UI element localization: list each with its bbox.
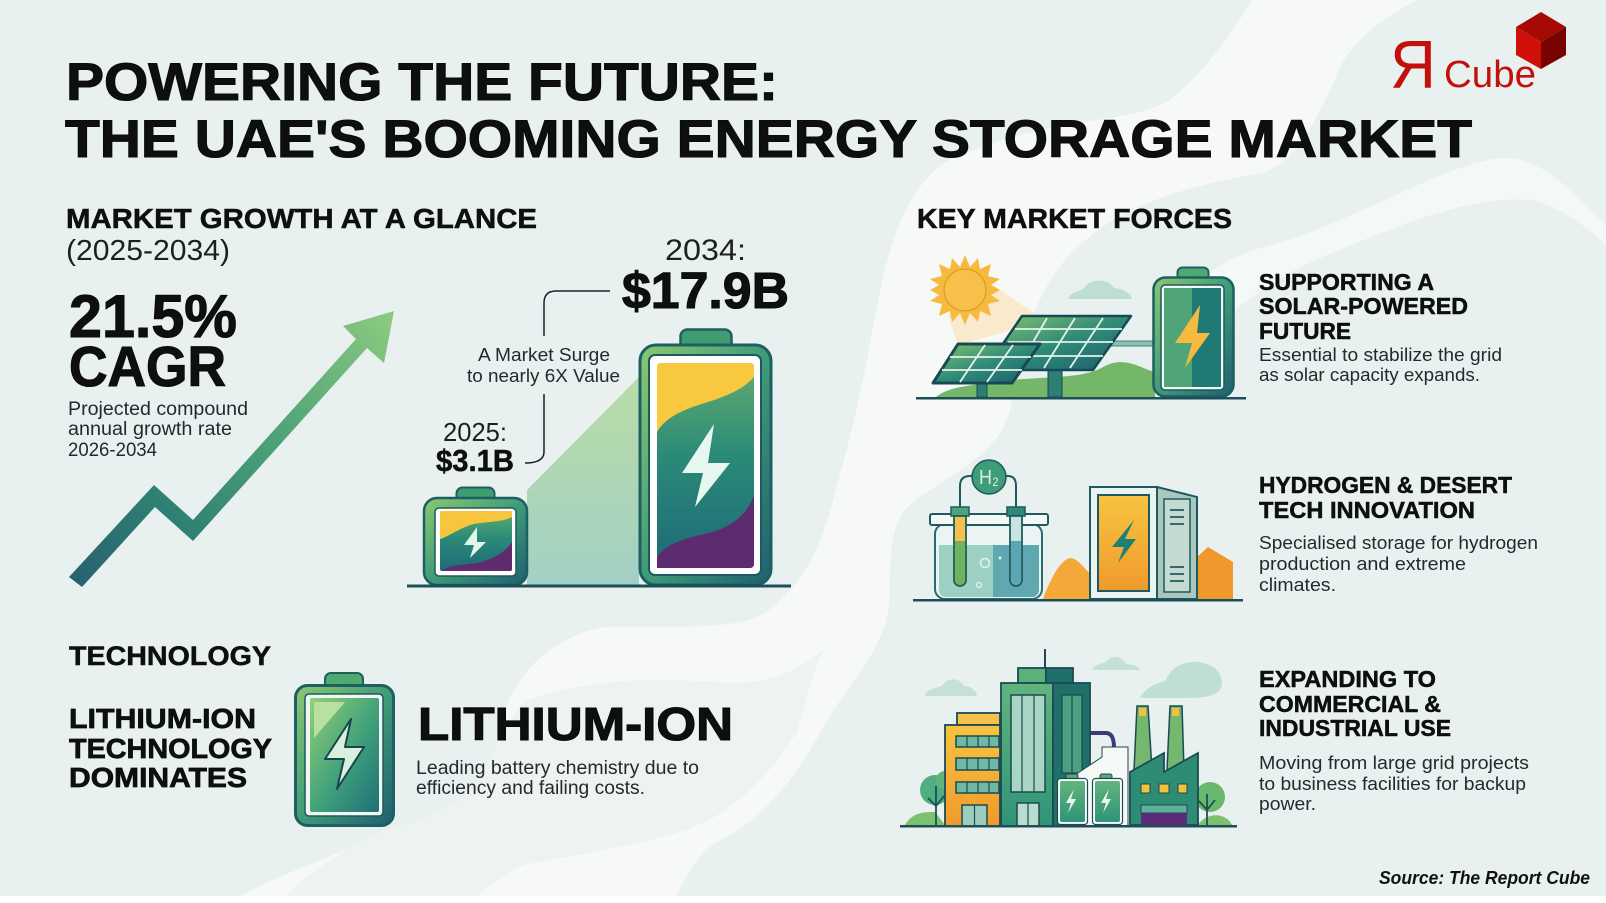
logo: R Cube: Я [1390, 27, 1436, 103]
text: supporting solar: SOLAR-POWERED [1259, 293, 1468, 319]
text: commercial: INDUSTRIAL USE [1259, 715, 1451, 741]
label: 2025 value [436, 417, 514, 478]
icon: solar battery [1154, 268, 1234, 396]
clouds [925, 657, 1222, 698]
lithium-ion dominates text: TECHNOLOGY [69, 733, 272, 764]
CAGR description: annual growth rate [68, 419, 232, 440]
heading: key market forces: KEY MARKET FORCES [917, 203, 1232, 234]
lithium-ion dominates text [69, 703, 272, 793]
lithium-ion callout: LITHIUM-ION [418, 698, 733, 750]
yellow building [945, 713, 1000, 826]
text: supporting solar: as solar capacity expands. [1259, 364, 1480, 385]
text: supporting solar [1259, 269, 1502, 385]
text: supporting solar: FUTURE [1259, 318, 1351, 344]
icon: hydrogen and desert storage [913, 460, 1243, 602]
lithium-ion callout: efficiency and failing costs. [416, 778, 645, 799]
text: hydrogen [1259, 472, 1538, 595]
icon: lithium-ion battery [296, 673, 394, 826]
lithium-ion callout [416, 698, 733, 799]
heading: market growth at a glance: (2025-2034) [66, 235, 230, 267]
chimneys [1134, 706, 1184, 770]
cabinet [1090, 487, 1197, 599]
icon: city and factory [900, 649, 1237, 828]
text: supporting solar: Essential to stabilize the grid [1259, 344, 1502, 365]
text: commercial: to business facilities for backup [1259, 773, 1526, 794]
text: commercial [1259, 666, 1529, 814]
CAGR description: 2026-2034 [68, 440, 157, 461]
panel: technology [69, 641, 733, 826]
icon: sun [930, 255, 1000, 325]
heading: market growth at a glance [66, 203, 537, 267]
lithium-ion dominates text: LITHIUM-ION [69, 703, 256, 734]
text: hydrogen: HYDROGEN & DESERT [1259, 472, 1512, 498]
logo: R Cube [1390, 12, 1566, 103]
text: hydrogen: Specialised storage for hydrogen [1259, 532, 1538, 553]
text: commercial: EXPANDING TO [1259, 666, 1436, 692]
factory [1130, 753, 1198, 825]
small batteries [1058, 774, 1122, 824]
label: 2034 value: 2034: [665, 234, 746, 267]
CAGR stat: CAGR [69, 335, 226, 399]
text: hydrogen: TECH INNOVATION [1259, 497, 1475, 523]
source note: Source: The Report Cube [1379, 868, 1590, 888]
connector callout: market surge [467, 291, 620, 463]
baseline [916, 397, 1246, 400]
title: POWERING THE FUTURE: [66, 53, 778, 112]
white block [1075, 747, 1128, 826]
CAGR description [68, 399, 248, 461]
tank [930, 507, 1048, 599]
connector callout: market surge: A Market Surge [478, 344, 610, 365]
tall building [1001, 649, 1090, 826]
hydrogen symbol [960, 460, 1016, 507]
growth wedge [527, 377, 639, 585]
label: 2025 value: $3.1B [436, 443, 514, 478]
lithium-ion callout: Leading battery chemistry due to [416, 758, 699, 779]
text: commercial: power. [1259, 793, 1316, 814]
baseline [913, 599, 1243, 602]
growth arrow [69, 311, 394, 587]
CAGR stat [69, 283, 237, 399]
label: 2025 value: 2025: [443, 417, 507, 447]
panel: market growth [66, 203, 791, 588]
baseline: growth [407, 584, 791, 588]
lithium-ion dominates text: DOMINATES [69, 762, 247, 793]
logo: R Cube: Cube [1444, 54, 1536, 96]
big battery 2034 [640, 330, 771, 585]
baseline [900, 825, 1237, 828]
CAGR description: Projected compound [68, 399, 248, 420]
hydrogen symbol: H₂ [979, 467, 999, 489]
CAGR stat: 21.5% [69, 283, 237, 350]
small battery 2025 [424, 488, 527, 585]
text: hydrogen: production and extreme [1259, 553, 1466, 574]
label: 2034 value: $17.9B [622, 262, 789, 319]
text: hydrogen: climates. [1259, 574, 1336, 595]
text: commercial: COMMERCIAL & [1259, 691, 1441, 717]
title [65, 53, 1472, 169]
trees [905, 771, 1232, 825]
connector callout: market surge: to nearly 6X Value [467, 365, 620, 386]
panel: key market forces [900, 203, 1538, 828]
heading: technology: TECHNOLOGY [69, 641, 271, 671]
text: commercial: Moving from large grid projects [1259, 752, 1529, 773]
text: supporting solar: SUPPORTING A [1259, 269, 1434, 295]
label: 2034 value [622, 234, 789, 319]
pipe [1088, 733, 1114, 748]
heading: market growth at a glance: MARKET GROWTH AT A GLANCE [66, 203, 537, 234]
icon: solar panels and battery [916, 255, 1246, 400]
title: THE UAE'S BOOMING ENERGY STORAGE MARKET [65, 110, 1472, 169]
